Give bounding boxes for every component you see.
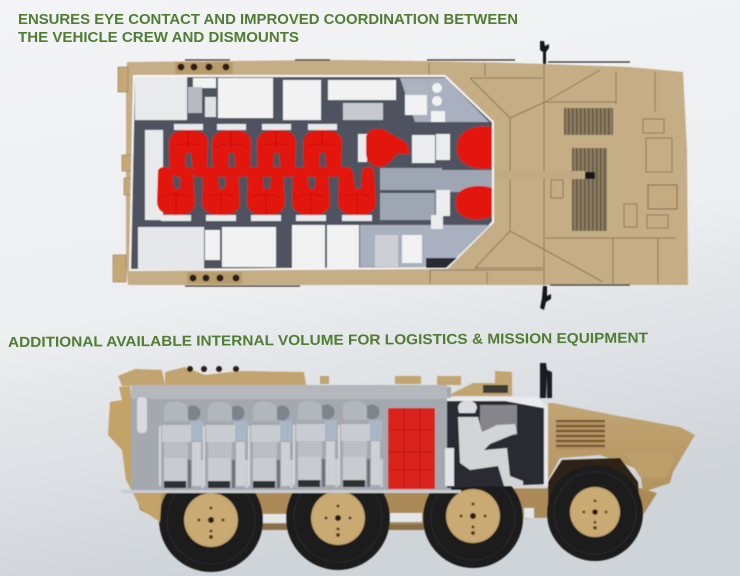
- smoke launcher muzzles: [187, 366, 239, 372]
- wheel 3: [423, 468, 523, 568]
- roof hatch: [447, 397, 547, 408]
- lower rail: [175, 524, 500, 530]
- dark corner: [426, 258, 457, 268]
- front hull nose: [548, 403, 695, 492]
- front seats: [456, 126, 492, 219]
- heading: eye contact: [18, 12, 518, 46]
- red equipment stack: [388, 408, 435, 489]
- driver figure: [458, 400, 523, 486]
- crew seats back row: [169, 124, 342, 177]
- hull dark edges: [185, 60, 630, 286]
- commander seat: [366, 129, 410, 167]
- crew seats front row: [157, 167, 376, 221]
- interior grey floor plates: [380, 168, 492, 220]
- smoke launchers top: [175, 62, 233, 74]
- compartment upper wall: [131, 385, 447, 399]
- smoke launchers bottom: [187, 272, 242, 284]
- wall bottle: [137, 397, 147, 433]
- roof fittings: [118, 367, 512, 396]
- soldiers: [159, 400, 383, 488]
- interior floor: [130, 76, 493, 270]
- wheel 1: [159, 468, 263, 572]
- lower hull: [135, 488, 657, 530]
- door edge: [544, 406, 548, 486]
- gap in lower hull: [263, 508, 534, 523]
- side view vehicle: [108, 363, 695, 572]
- heading: eye contact: THE VEHICLE CREW AND DISMOUNTS: [18, 30, 299, 46]
- rear door: [108, 386, 162, 522]
- interior white stowage boxes: [135, 77, 445, 270]
- interior blue-grey right section: [360, 78, 490, 267]
- driver compartment: [447, 398, 547, 488]
- hatch block: [648, 185, 677, 209]
- floor line: [121, 490, 461, 493]
- heading: internal volume: ADDITIONAL AVAILABLE INTERNAL VOLUME FOR LOGISTICS & MISSION EQUIPMENT: [8, 331, 648, 351]
- mirror: [540, 363, 552, 398]
- muzzle: [585, 172, 595, 179]
- driver compartment rear wall: [480, 405, 517, 435]
- upper vent: [564, 108, 613, 135]
- wheel 4: [547, 465, 643, 561]
- icon: top mirror: [540, 41, 549, 64]
- engine vent: [572, 148, 607, 231]
- hull side fittings: [113, 67, 133, 282]
- wheel arch: [548, 458, 640, 510]
- driver seat strip: [445, 448, 454, 486]
- lower nose plate: [625, 452, 675, 478]
- driver consoles: [358, 134, 450, 229]
- hull panel lines: [429, 63, 676, 285]
- side grille: [556, 420, 605, 450]
- icon: bottom mirror: [540, 286, 551, 310]
- top view vehicle: [113, 41, 688, 310]
- gun barrel: [496, 171, 585, 179]
- roof grille: [483, 385, 508, 393]
- heading: eye contact: ENSURES EYE CONTACT AND IMPROVED COORDINATION BETWEEN: [18, 12, 518, 28]
- hull top view: [126, 60, 688, 285]
- crew compartment: [131, 387, 451, 490]
- wheel 2: [286, 466, 390, 570]
